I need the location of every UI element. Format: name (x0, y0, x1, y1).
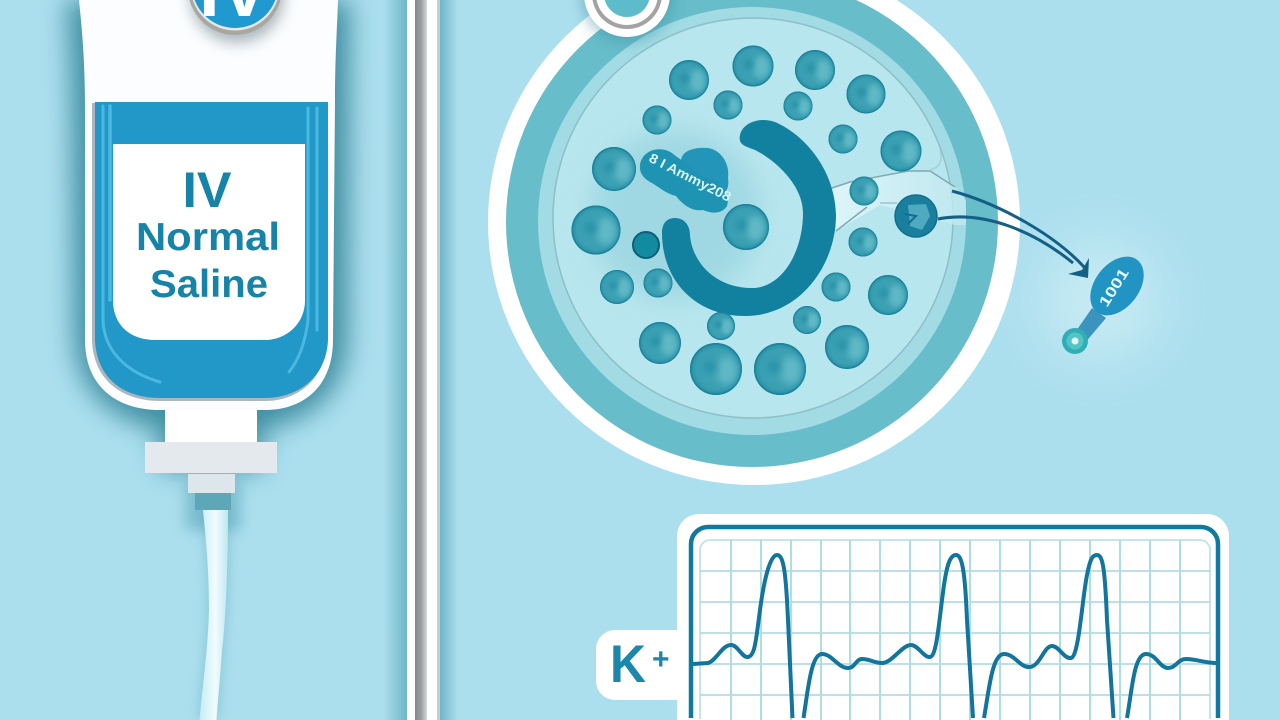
IV bag (66, 0, 350, 720)
bag clamp (145, 442, 277, 473)
binding molecule: 8 I Ammy208 (647, 150, 734, 205)
binding molecule (640, 148, 734, 213)
saline fluid (95, 102, 328, 398)
exit arrows (938, 191, 1089, 278)
label text: Normal: Normal (136, 216, 280, 259)
potassium key tag: 1001 (1096, 265, 1133, 310)
K+ tab: + (652, 643, 670, 676)
label text: Saline: Saline (150, 263, 268, 306)
cytoplasm shading (590, 130, 760, 300)
ECG trace (693, 555, 1216, 718)
nucleus arc (662, 120, 836, 316)
top badge (188, 0, 284, 43)
fluid edge (92, 103, 327, 401)
dark ion (633, 232, 659, 258)
exiting ion (895, 195, 937, 237)
bag connector (188, 474, 235, 493)
label panel (113, 144, 305, 340)
central ion (723, 204, 769, 250)
bag body (79, 0, 338, 410)
hanger ring (581, 0, 673, 42)
cell diagram (488, 0, 1160, 485)
fluid highlights (103, 106, 317, 382)
K+ tab (596, 630, 706, 700)
monitor frame (691, 527, 1218, 718)
bag neck (165, 395, 257, 445)
label text: IV: IV (182, 162, 232, 218)
cell cytoplasm (553, 18, 953, 418)
K+ tab: K (610, 635, 646, 694)
cell membrane band (506, 0, 998, 467)
monitor grid (700, 540, 1210, 720)
cell interior band (538, 7, 966, 435)
monitor card (677, 514, 1229, 720)
ECG monitor (596, 514, 1229, 720)
bag tube (185, 480, 241, 720)
potassium key tag (1062, 246, 1155, 354)
key glow (1040, 240, 1160, 360)
IV pole (383, 0, 458, 720)
potassium spheres (572, 46, 922, 395)
bag port (195, 493, 231, 510)
channel passage (832, 150, 966, 231)
cell outer white ring (488, 0, 1020, 485)
